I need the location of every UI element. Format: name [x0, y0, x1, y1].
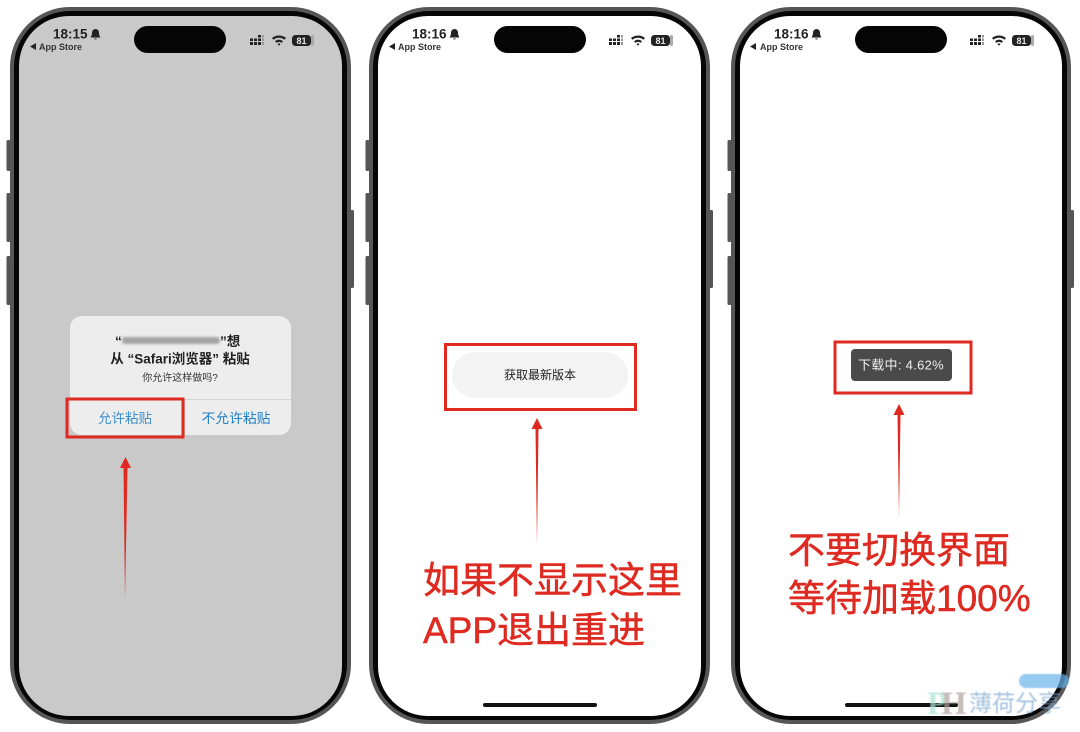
phone 3 download toast: 下载中: 4.62%	[858, 358, 944, 372]
phone 3 status bar: 18:16	[774, 26, 809, 42]
phone 2 latest version button: 获取最新版本	[504, 367, 576, 382]
phone 2 screen	[378, 16, 701, 716]
phone 2 dynamic island	[494, 26, 586, 53]
phone 3 home indicator	[845, 703, 958, 707]
phone 1 dynamic island	[134, 26, 226, 53]
phone 3 instruction text: 不要切换界面	[788, 530, 1010, 571]
phone 3 download toast	[851, 349, 952, 381]
phone 2 highlight box	[446, 344, 636, 410]
phone 3 instruction text	[788, 530, 1031, 619]
phone 2 home indicator	[483, 703, 597, 707]
phone 2 frame	[369, 7, 710, 724]
watermark	[927, 674, 1069, 722]
phone 3 arrow	[894, 404, 904, 518]
watermark badge	[1019, 674, 1069, 688]
phone 2 latest version button	[452, 352, 628, 398]
phone 1 alert dialog: 允许粘贴	[98, 411, 152, 426]
phone 2 instruction text: 如果不显示这里	[423, 560, 682, 601]
phone 3 side buttons	[728, 140, 1074, 305]
watermark logo letters: P	[927, 686, 947, 722]
phone 2 instruction text	[423, 560, 682, 651]
phone 1 status bar	[30, 26, 314, 52]
phone 2 arrow	[532, 418, 542, 546]
phone 2 status bar	[389, 26, 673, 52]
watermark name: 薄荷分享	[969, 690, 1061, 716]
phone 1 highlight box	[67, 399, 183, 437]
phone 1 alert dialog: ”想	[220, 333, 241, 349]
phone 1 alert dialog: 从 “Safari浏览器” 粘贴	[110, 350, 250, 366]
phone 3 screen	[740, 16, 1062, 716]
phone 3: downloading progress	[728, 7, 1074, 724]
phone 1 alert dialog: 不允许粘贴	[202, 411, 271, 426]
phone 1 alert dialog: 你允许这样做吗?	[142, 371, 218, 384]
phone 3 status bar	[750, 26, 1034, 52]
phone 1 arrow	[120, 457, 131, 598]
phone 1: paste permission dialog	[6, 7, 354, 724]
phone 2: get latest version	[366, 7, 713, 724]
phone 1 alert dialog: “	[115, 334, 122, 349]
phone 2 status bar: 18:16	[412, 26, 447, 42]
phone 1 status bar: App Store	[39, 42, 82, 52]
phone 2 instruction text: APP退出重进	[423, 610, 645, 651]
phone 1 status bar: 18:15	[53, 26, 88, 42]
phone 3 frame	[731, 7, 1071, 724]
phone 3 dynamic island	[855, 26, 947, 53]
phone 3 status bar: App Store	[760, 42, 803, 52]
phone 1 side buttons	[6, 140, 354, 305]
phone 3 instruction text: 等待加载100%	[788, 578, 1031, 619]
phone 3 highlight box	[835, 342, 971, 393]
phone 2 status bar: App Store	[398, 42, 441, 52]
phone 1 screen	[19, 16, 342, 716]
phone 1 alert dialog	[70, 316, 291, 435]
phone 2 side buttons	[366, 140, 713, 305]
watermark: H	[941, 686, 967, 722]
phone 1 frame	[10, 7, 351, 724]
blurred app name	[122, 337, 220, 344]
